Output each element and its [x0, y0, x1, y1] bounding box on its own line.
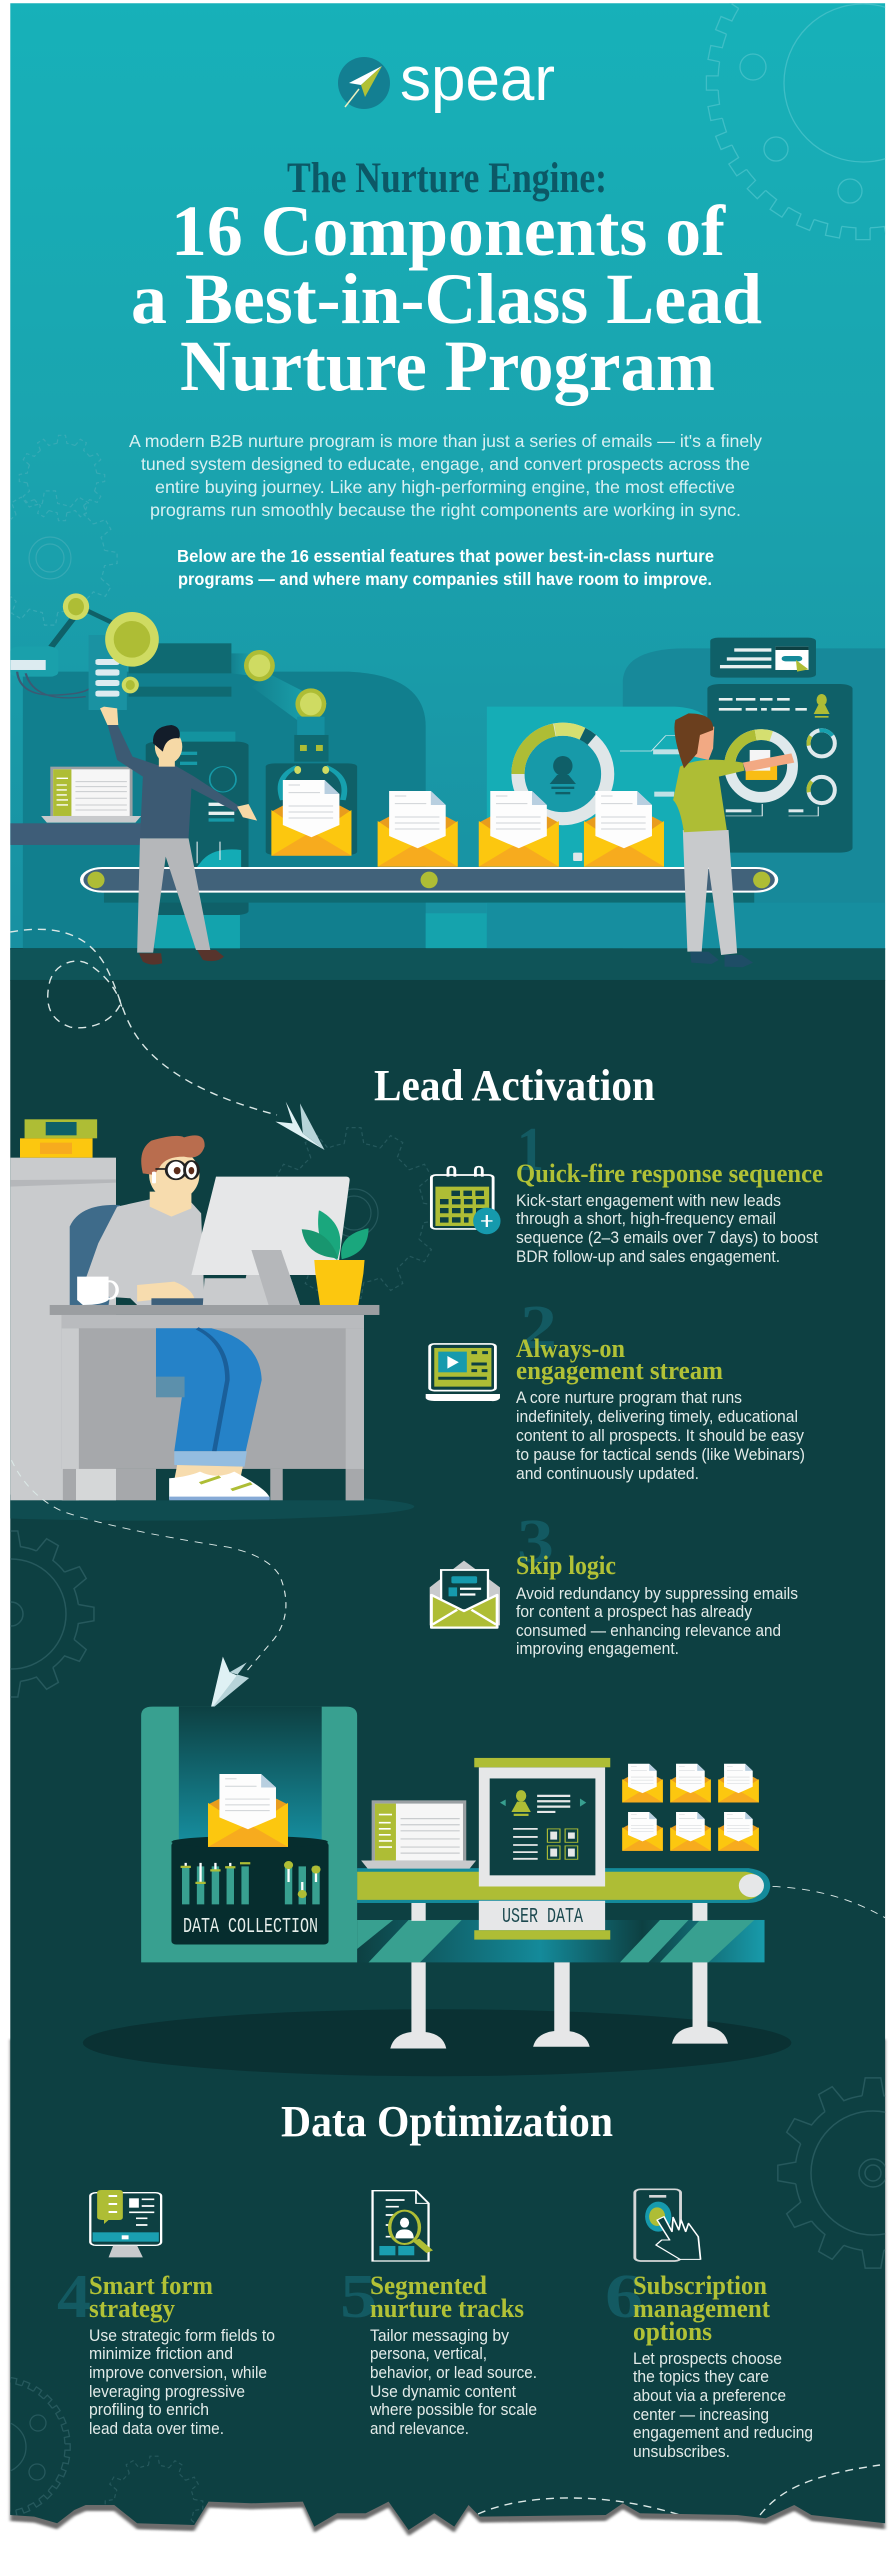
- feature 4 body: leveraging progressive: [89, 2382, 245, 2401]
- stacked envelopes: [622, 1764, 759, 1851]
- feature 5 body: [369, 2326, 537, 2438]
- feature 2 title: engagement stream: [516, 1356, 723, 1385]
- dashed path: loop to paper plane: [10, 929, 277, 1115]
- feature 6 body: engagement and reducing: [633, 2423, 813, 2442]
- feature 6 body: Let prospects choose: [633, 2349, 782, 2368]
- feature 5 body: behavior, or lead source.: [370, 2363, 537, 2382]
- feature 1 body: through a short, high-frequency email: [516, 1209, 776, 1228]
- gear: right lower: [776, 2076, 891, 2270]
- feature 6 body: about via a preference: [633, 2386, 786, 2405]
- monitor: [191, 1177, 350, 1305]
- feature 3 body: for content a prospect has already: [516, 1602, 752, 1621]
- upper right ui panel: [710, 638, 816, 678]
- feature 2 body: to pause for tactical sends (like Webinars): [516, 1445, 805, 1464]
- feature 5 body: Tailor messaging by: [370, 2326, 509, 2345]
- feature 4 body: improve conversion, while: [89, 2363, 267, 2382]
- section heading: data optimization: Data Optimization: [281, 2097, 613, 2146]
- feature 5 body: Use dynamic content: [370, 2382, 516, 2401]
- feature 2 body: [516, 1388, 805, 1483]
- feature 4: [57, 2263, 275, 2438]
- section heading: lead activation: Lead Activation: [374, 1061, 655, 1110]
- feature 6 body: center — increasing: [633, 2405, 769, 2424]
- plant: [302, 1211, 369, 1305]
- feature 4 body: lead data over time.: [89, 2419, 224, 2438]
- intro text: programs run smoothly because the right components are working in sync.: [150, 500, 741, 520]
- intro bold text: [177, 546, 714, 589]
- label: user data: USER DATA: [502, 1906, 583, 1929]
- feature 4 body: Use strategic form fields to: [89, 2326, 275, 2345]
- feature 1 body: BDR follow-up and sales engagement.: [516, 1247, 780, 1266]
- chair: [70, 1205, 120, 1305]
- icon: phone touch: [635, 2189, 701, 2261]
- number 4: 4: [57, 2263, 91, 2331]
- feature 1: [516, 1116, 823, 1266]
- title line 3: Nurture Program: [180, 326, 715, 406]
- right dashboard panel: [707, 684, 853, 853]
- desk with laptop: [10, 767, 143, 845]
- data collection machine and dashed path: [11, 1460, 885, 2076]
- feature 5 body: and relevance.: [370, 2419, 469, 2438]
- title: [131, 155, 762, 406]
- feature 1 body: [516, 1191, 818, 1266]
- icon: laptop video: [426, 1344, 500, 1401]
- feature 4 body: [89, 2326, 275, 2438]
- feature 6 body: [633, 2349, 813, 2461]
- machine shadow: [83, 2009, 791, 2076]
- intro text: [129, 431, 762, 520]
- gear: dashed bottom: [104, 2456, 204, 2523]
- dashed path right: [773, 1886, 885, 1918]
- hopper frame: [141, 1707, 357, 1962]
- number 3: 3: [517, 1508, 554, 1576]
- icon: document magnifier: [373, 2191, 430, 2261]
- woman: [673, 713, 794, 967]
- envelopes on conveyor: [378, 791, 664, 867]
- illustration: man at desk: [0, 1102, 501, 1521]
- intro bold text: programs — and where many companies still have room to improve.: [178, 569, 712, 589]
- torn paper shadow: [10, 2039, 885, 2536]
- feature 4 title: Smart form: [89, 2271, 213, 2300]
- feature 4 title: [89, 2271, 213, 2323]
- mug: [77, 1277, 117, 1305]
- title line 1: 16 Components of: [171, 191, 726, 271]
- gear: dashed behind lead activation: [276, 1127, 432, 1299]
- feature 6 body: the topics they care: [633, 2367, 769, 2386]
- centre analytics ring: [511, 722, 680, 861]
- man's torso: [80, 1199, 205, 1305]
- feature 2 title: Always-on: [516, 1334, 626, 1363]
- feature 3 body: Avoid redundancy by suppressing emails: [516, 1584, 798, 1603]
- feature 2 title: [516, 1334, 723, 1385]
- man: [100, 707, 257, 965]
- feature 1 title: Quick-fire response sequence: [516, 1159, 823, 1188]
- number 1: 1: [517, 1116, 544, 1184]
- machine backdrop: [23, 643, 885, 948]
- logo: [338, 57, 554, 113]
- feature 3 body: [516, 1584, 798, 1658]
- left robot arm: [10, 593, 159, 710]
- feature 5 body: where possible for scale: [369, 2400, 537, 2419]
- feature 6: [605, 2263, 813, 2461]
- feature 3 title: Skip logic: [516, 1551, 616, 1580]
- gear: header dashed left: [0, 434, 118, 626]
- feature 2 body: and continuously updated.: [516, 1464, 699, 1483]
- feature 6 title: management: [633, 2294, 770, 2323]
- gear: top right: [706, 3, 886, 240]
- icon: monitor form: [90, 2190, 161, 2257]
- number 2: 2: [520, 1294, 557, 1362]
- feature 5 title: Segmented: [370, 2271, 488, 2300]
- feature 6 title: Subscription: [633, 2271, 768, 2300]
- dashed path to second plane: [11, 1460, 286, 1672]
- feature 6 title: [633, 2271, 770, 2346]
- feature 5: [340, 2263, 537, 2438]
- dashed path: bottom right: [478, 2465, 880, 2515]
- label: data collection: DATA COLLECTION: [183, 1916, 318, 1939]
- striped lower band: [357, 1920, 765, 1962]
- intro text: A modern B2B nurture program is more than just a series of emails — it's a finely: [129, 431, 762, 451]
- paper plane: [275, 1102, 325, 1150]
- illustration: nurture engine factory: [0, 593, 891, 1000]
- title line 2: a Best-in-Class Lead: [131, 259, 762, 339]
- sliders: [181, 1861, 321, 1904]
- second robot arm and claw: [231, 650, 357, 855]
- feature 3 body: consumed — enhancing relevance and: [516, 1621, 781, 1640]
- gear: bottom left: [10, 2376, 71, 2516]
- machine legs: [390, 1903, 728, 2049]
- logo wordmark: spear: [400, 45, 555, 114]
- feature 4 body: profiling to enrich: [89, 2400, 209, 2419]
- feature 4 body: minimize friction and: [89, 2344, 233, 2363]
- man's legs: [156, 1328, 270, 1500]
- green conveyor: [357, 1868, 770, 1903]
- header background: [0, 0, 891, 950]
- intro text: tuned system designed to educate, engage, and convert prospects across the: [141, 454, 750, 474]
- feature 1 body: sequence (2–3 emails over 7 days) to boost: [516, 1228, 818, 1247]
- feature 3 body: improving engagement.: [516, 1639, 679, 1658]
- kiosk: [474, 1758, 610, 1940]
- feature 5 body: persona, vertical,: [370, 2344, 487, 2363]
- desk: [50, 1305, 379, 1500]
- control panel behind man: [146, 732, 249, 948]
- gear: left middle: [10, 1530, 95, 1698]
- icon: open envelope: [430, 1561, 500, 1628]
- feature 2 body: indefinitely, delivering timely, educational: [516, 1407, 798, 1426]
- feature 6 body: unsubscribes.: [633, 2442, 730, 2461]
- laptop on conveyor: [361, 1800, 476, 1869]
- feature 1 body: Kick-start engagement with new leads: [516, 1191, 781, 1210]
- feature 5 title: nurture tracks: [370, 2294, 524, 2323]
- man's head: [141, 1135, 205, 1217]
- hand and keyboard: [137, 1282, 226, 1305]
- floor: [0, 948, 891, 1000]
- data optimization icons: [90, 2189, 701, 2261]
- kicker: The Nurture Engine:: [287, 155, 607, 202]
- logo mark: [338, 57, 390, 109]
- envelope in claw: [271, 780, 351, 856]
- floor shadow: [0, 1493, 414, 1521]
- feature 3: [516, 1508, 798, 1658]
- intro text: entire buying journey. Like any high-performing engine, the most effective: [155, 477, 735, 497]
- icon: calendar plus: [431, 1167, 501, 1234]
- feature 5 title: [370, 2271, 524, 2323]
- envelope in hopper: [208, 1774, 288, 1847]
- paper plane 2: [210, 1657, 249, 1710]
- feature 2 body: A core nurture program that runs: [516, 1388, 742, 1407]
- intro bold text: Below are the 16 essential features that power best-in-class nurture: [177, 546, 714, 566]
- dark body background: [0, 948, 891, 2560]
- feature 2: [516, 1294, 805, 1483]
- number 6: 6: [605, 2263, 643, 2331]
- feature 6 title: options: [633, 2317, 712, 2346]
- number 5: 5: [340, 2263, 377, 2331]
- conveyor belt: [82, 868, 777, 903]
- feature 2 body: content to all prospects. It should be easy: [516, 1426, 804, 1445]
- cabinet and books: [10, 1119, 116, 1500]
- feature 4 title: strategy: [89, 2294, 175, 2323]
